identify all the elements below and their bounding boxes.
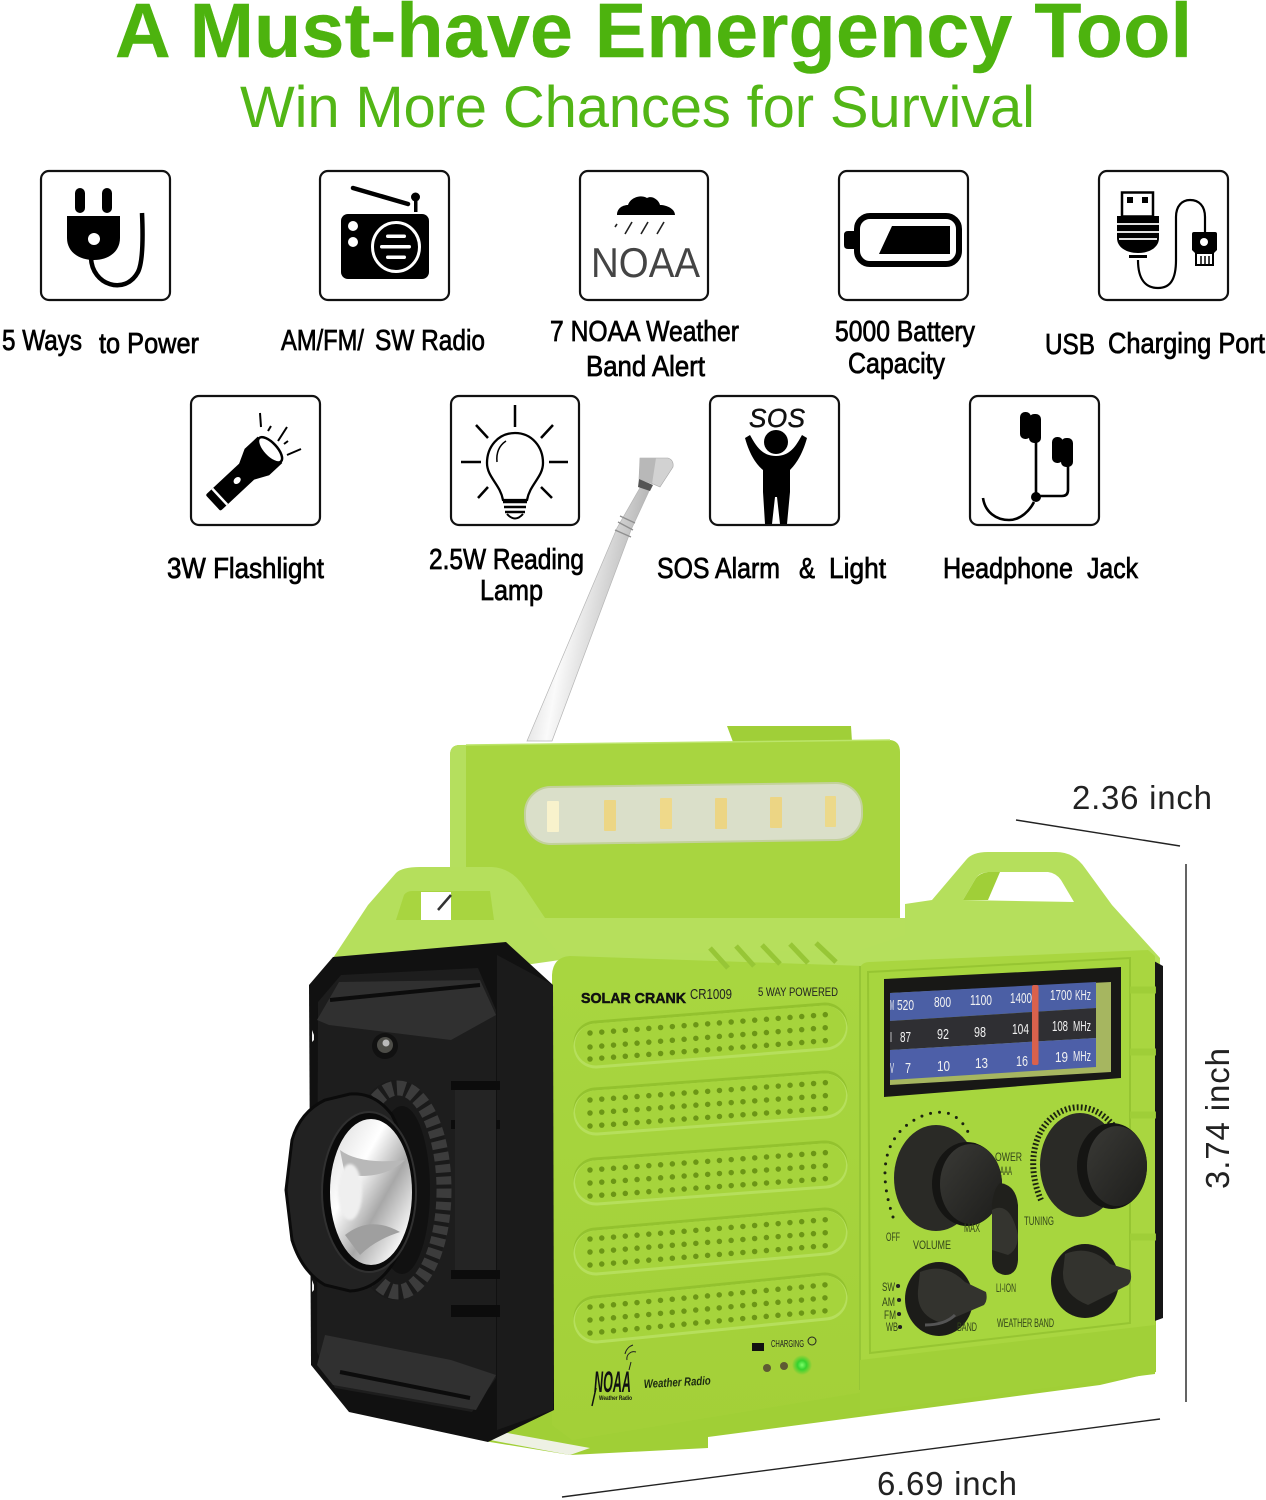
control labels: OWER [995, 1150, 1022, 1164]
display frequency scale: 19 [1055, 1049, 1068, 1066]
label: 2.5W reading lamp [429, 544, 584, 607]
radio antenna [527, 458, 673, 741]
tuning knob [1040, 1113, 1147, 1217]
label: 3W flashlight: 3W Flashlight [167, 553, 324, 585]
label: USB charging port: USB [1045, 329, 1095, 361]
label: 7 NOAA weather band alert: Band Alert [586, 351, 705, 383]
vent ridges [710, 943, 836, 968]
display frequency scale: 10 [937, 1058, 950, 1075]
display frequency scale: 87 [900, 1029, 911, 1046]
label: 7 NOAA weather band alert [550, 316, 739, 383]
tuning display [884, 967, 1121, 1097]
brand text: CR1009 [690, 986, 732, 1003]
label: SOS alarm and light: Light [829, 553, 886, 585]
label: SOS alarm and light: & [799, 553, 815, 585]
display frequency scale: 1400 [1010, 990, 1032, 1007]
dimension: width 2.36 inch: 2.36 inch [1072, 779, 1212, 816]
feature tile: NOAA weather band alert [580, 171, 708, 300]
control labels: BAND [957, 1320, 977, 1334]
control labels: VOLUME [913, 1238, 951, 1252]
label: 2.5W reading lamp: Lamp [480, 575, 543, 607]
control labels: AAA [1000, 1164, 1012, 1178]
subtitle: Win More Chances for Survival [240, 75, 1035, 140]
charging indicators [752, 1337, 816, 1375]
label: 5000 battery capacity: 5000 Battery [835, 316, 975, 348]
control labels: FM [884, 1308, 896, 1322]
lower bevel [345, 1320, 1156, 1455]
display frequency scale: 520 [897, 997, 914, 1014]
black flashlight housing [286, 942, 554, 1442]
feature tile: 5 ways to power [41, 171, 170, 300]
control panel [860, 950, 1155, 1390]
label: 2.5W reading lamp: 2.5W Reading [429, 544, 584, 576]
icon: radio [341, 188, 429, 279]
right side black strip [1152, 960, 1163, 1322]
band knob [905, 1262, 987, 1336]
body top and handles [333, 852, 1160, 1100]
icon: USB cable [1117, 192, 1217, 288]
display frequency scale: V [890, 1060, 894, 1077]
NOAA weather radio logo [592, 1345, 711, 1406]
radio device [286, 726, 1163, 1455]
display frequency scale: 104 [1012, 1021, 1029, 1038]
feature tile: AM/FM/SW radio [320, 171, 449, 300]
label: 7 NOAA weather band alert: 7 NOAA Weather [550, 316, 739, 348]
control labels: WB [886, 1320, 898, 1334]
label: 5 ways to power: to Power [99, 328, 199, 360]
feature tile: SOS alarm and light [710, 396, 839, 525]
feature tile: headphone jack [970, 396, 1099, 525]
weather band knob [1051, 1244, 1131, 1318]
power source slider [992, 1183, 1018, 1275]
display frequency scale: 13 [975, 1055, 988, 1072]
control labels: LI-ION [996, 1281, 1016, 1295]
charging indicators: CHARGING [771, 1339, 804, 1350]
feature tile: 3W flashlight [191, 396, 320, 525]
flashlight lens [330, 1119, 412, 1265]
volume knob [894, 1125, 1002, 1231]
small sensor lens [372, 1033, 398, 1059]
label: USB charging port [1045, 328, 1265, 361]
dimension: width 2.36 inch [1016, 779, 1212, 846]
NOAA weather radio logo: Weather Radio [643, 1374, 711, 1391]
dimension: length 6.69 inch [562, 1419, 1160, 1500]
display frequency scale: 108 [1052, 1018, 1068, 1035]
display frequency scale: 7 [905, 1060, 911, 1077]
label: SOS alarm and light [657, 553, 886, 585]
feature tile: USB charging port [1099, 171, 1228, 300]
display frequency scale: 1100 [970, 992, 992, 1009]
display frequency scale: I [890, 1029, 892, 1046]
control labels: SW [882, 1280, 895, 1294]
icon: battery [844, 216, 959, 264]
left handle opening [396, 891, 494, 920]
NOAA weather radio logo: NOAA [594, 1366, 631, 1399]
control labels: TUNING [1024, 1214, 1054, 1228]
display frequency scale: MHz [1073, 1018, 1091, 1035]
control labels [882, 1150, 1054, 1334]
label: AM/FM/SW radio: AM/FM/ [281, 325, 365, 357]
front speaker face [552, 956, 864, 1440]
label: AM/FM/SW radio [281, 325, 485, 357]
icon: SOS figure: SOS [749, 403, 806, 433]
control labels: MAX [964, 1221, 980, 1235]
icon: power plug [67, 188, 143, 285]
label: 5000 battery capacity: Capacity [848, 348, 945, 380]
icon: flashlight [201, 413, 301, 516]
dimension: height 3.74 inch: 3.74 inch [1199, 1048, 1236, 1189]
display frequency scale: KHz [1075, 987, 1091, 1004]
brand text [581, 985, 838, 1007]
label: 5000 battery capacity [835, 316, 975, 380]
brand text: SOLAR CRANK [581, 990, 686, 1007]
display frequency scale: MHz [1073, 1048, 1091, 1065]
label: headphone jack: Headphone [943, 553, 1073, 585]
control labels: OFF [886, 1230, 900, 1244]
display frequency scale: 92 [937, 1026, 949, 1043]
label: headphone jack: Jack [1087, 553, 1138, 585]
flashlight head [286, 1080, 451, 1300]
label: AM/FM/SW radio: SW Radio [375, 325, 485, 357]
brand text: 5 WAY POWERED [758, 985, 838, 999]
feature tile: 2.5W reading lamp [451, 396, 579, 525]
icon: NOAA cloud: NOAA [591, 239, 700, 286]
label: 5 ways to power [2, 325, 199, 360]
display frequency scale: 1700 [1050, 987, 1072, 1004]
rear solar panel with reading lamp [450, 726, 900, 925]
NOAA weather radio logo: Weather Radio [599, 1396, 632, 1402]
speaker grille slots [590, 1014, 834, 1333]
volume and tuning scale dots [885, 1107, 1113, 1217]
display frequency scale: 800 [934, 994, 951, 1011]
feature tile: 5000 battery capacity [839, 171, 968, 300]
control labels: AM [882, 1295, 895, 1309]
label: SOS alarm and light: SOS Alarm [657, 553, 780, 585]
right handle opening [963, 872, 1074, 902]
control labels: WEATHER BAND [997, 1316, 1054, 1330]
display frequency scale: 16 [1016, 1053, 1028, 1070]
reading lamp LED bar [525, 783, 862, 844]
icon: light bulb [461, 405, 568, 518]
display frequency scale [890, 987, 1091, 1077]
display frequency scale: M [890, 997, 894, 1014]
display frequency scale: 98 [974, 1024, 986, 1041]
label: 5 ways to power: 5 Ways [2, 325, 82, 357]
icon: earphones [983, 412, 1073, 520]
